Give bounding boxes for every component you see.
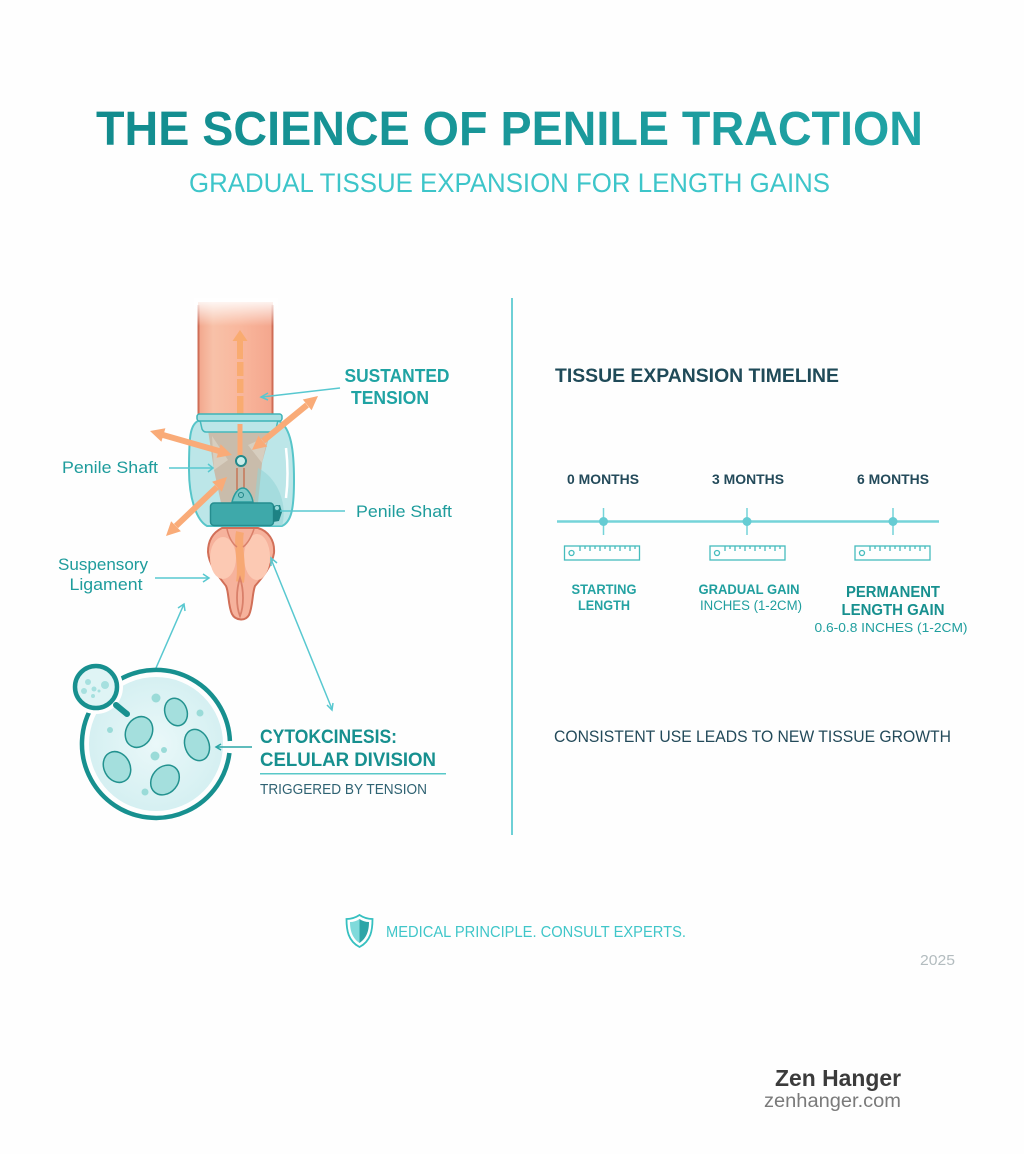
- magnifier: [69, 660, 127, 714]
- divider: [511, 298, 513, 835]
- icon: shield: [346, 915, 372, 947]
- centre pivot: [236, 456, 246, 466]
- month labels: 6 MONTHS: [857, 471, 929, 487]
- label: penile shaft left: Penile Shaft: [62, 458, 158, 477]
- caption: starting length: [572, 582, 636, 613]
- disclaimer: MEDICAL PRINCIPLE. CONSULT EXPERTS.: [386, 924, 686, 941]
- arrow: cell up: [156, 604, 185, 668]
- cells: [98, 695, 214, 801]
- arrow: tissue to cytokinesis: [271, 558, 333, 710]
- lower tissue: [208, 528, 274, 619]
- arrow: tension label: [261, 388, 340, 400]
- outward force arrows: [150, 396, 318, 536]
- base clamp: [210, 488, 282, 526]
- brand url: zenhanger.com: [764, 1091, 901, 1112]
- caption: gradual gain: [698, 582, 802, 613]
- traction device cup: [189, 414, 294, 526]
- label: cytokinesis: [260, 727, 446, 798]
- label: suspensory ligament: [58, 555, 148, 594]
- vertical tension arrow: [232, 330, 248, 415]
- ruler 3 months: [710, 546, 785, 560]
- label: cytokinesis: CYTOKCINESIS:: [260, 727, 397, 748]
- label: sustained tension: TENSION: [351, 388, 429, 408]
- caption: permanent gain: PERMANENT: [846, 584, 941, 601]
- label: penile shaft right: Penile Shaft: [356, 502, 452, 521]
- caption: permanent gain: [814, 584, 968, 635]
- label: suspensory ligament: Ligament: [70, 575, 143, 594]
- title: THE SCIENCE OF PENILE TRACTION: [96, 103, 923, 156]
- timeline line: [557, 508, 939, 535]
- timeline note: CONSISTENT USE LEADS TO NEW TISSUE GROWTH: [554, 728, 951, 746]
- arrow: cytokinesis to cell: [216, 744, 252, 750]
- label: suspensory ligament: Suspensory: [58, 555, 148, 574]
- subtitle: GRADUAL TISSUE EXPANSION FOR LENGTH GAINS: [189, 168, 830, 198]
- brand name: Zen Hanger: [775, 1065, 901, 1091]
- cup rim: [200, 420, 278, 432]
- ruler 0 months: [564, 546, 640, 560]
- month labels: 3 MONTHS: [712, 471, 784, 487]
- caption: starting length: STARTING: [572, 582, 636, 597]
- shaft: [194, 298, 278, 418]
- panel: anatomy diagram: [150, 298, 318, 619]
- timeline heading: TISSUE EXPANSION TIMELINE: [555, 365, 839, 387]
- ruler 6 months: [855, 546, 930, 560]
- caption: permanent gain: 0.6-0.8 INCHES (1-2CM): [814, 620, 968, 635]
- dots: [107, 694, 204, 796]
- arrow: shaft left: [169, 464, 213, 472]
- caption: starting length: LENGTH: [578, 598, 630, 613]
- month labels: [567, 471, 929, 487]
- arrow: ligament: [155, 574, 209, 582]
- cell circle: [82, 670, 230, 818]
- year: 2025: [920, 952, 955, 969]
- label: cytokinesis: TRIGGERED BY TENSION: [260, 781, 427, 798]
- label: cytokinesis: CELULAR DIVISION: [260, 750, 436, 771]
- line: shaft right: [280, 510, 345, 512]
- label: sustained tension: [344, 366, 450, 408]
- month labels: 0 MONTHS: [567, 471, 639, 487]
- label: sustained tension: SUSTANTED: [344, 366, 450, 386]
- caption: permanent gain: LENGTH GAIN: [842, 602, 944, 619]
- panel: timeline: [554, 365, 968, 746]
- caption: gradual gain: GRADUAL GAIN: [698, 582, 800, 597]
- caption: gradual gain: INCHES (1-2CM): [700, 598, 802, 613]
